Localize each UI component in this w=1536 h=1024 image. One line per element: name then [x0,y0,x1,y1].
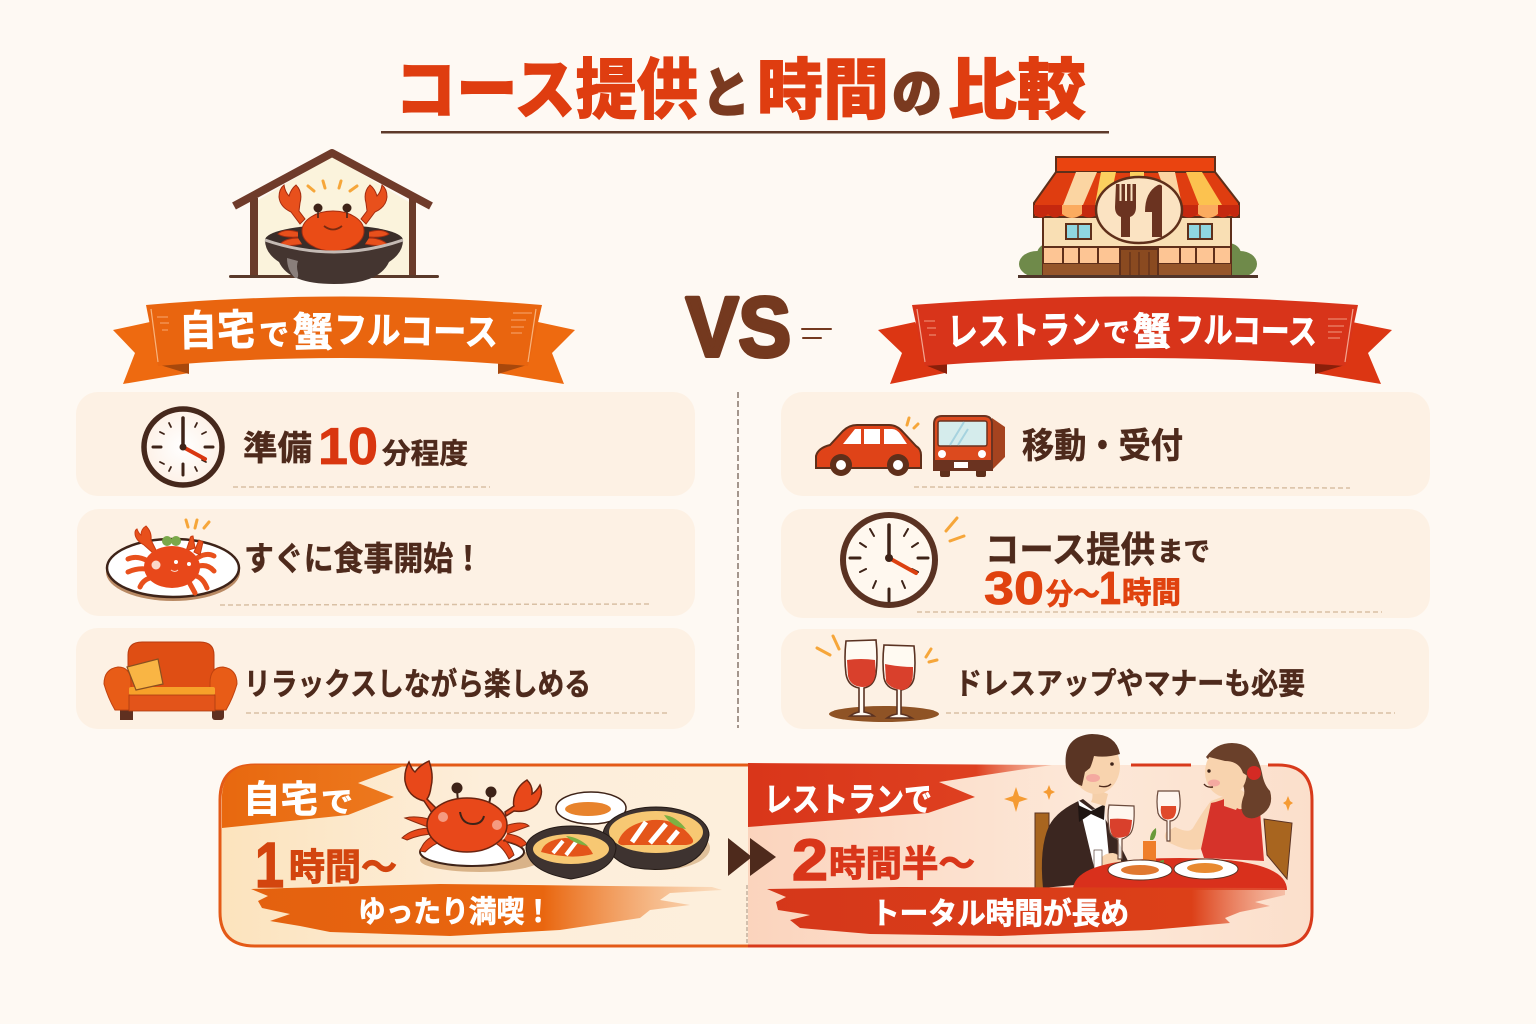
ribbon text: フルコース [334,310,498,353]
text [243,418,468,476]
banner flag: restaurant: レストランで [764,781,932,818]
restaurant brush stroke with text [767,887,1285,936]
panel: start eating card [77,509,695,616]
text: 分～ [1046,578,1100,611]
icon: clock [144,409,222,485]
text: 30 [984,562,1044,614]
banner flag: home: で [321,787,353,819]
panel: travel card [781,392,1430,496]
restaurant brush stroke with text: トータル時間が長め [871,897,1129,931]
title: と [702,64,750,124]
text [984,529,1210,614]
panel: relax card [76,628,695,729]
title underline [381,131,1109,134]
banner flag: restaurant [748,763,1052,827]
ribbon: restaurant [878,296,1392,384]
VS label: VS [686,280,791,374]
illustration: couple dining [1004,734,1293,890]
title [395,53,1086,127]
icon: wine glasses [817,636,939,722]
ribbon text: レストラン [947,310,1101,354]
ribbon text: で [1103,318,1130,348]
icon: bus [934,416,1005,477]
ribbon: home [113,296,575,384]
icon: house with crab pot [229,153,439,284]
panel: dress-up card [781,629,1429,729]
illustration: crab with dishes [402,761,710,879]
title: 比較 [948,53,1086,127]
title: 時間 [757,53,889,127]
panel: wait card [781,509,1430,618]
ribbon text [179,306,498,355]
text: コース提供 [985,529,1155,570]
home time value [255,829,397,901]
icon: sofa [104,642,237,720]
panel: relax card: リラックスしながら楽しめる [244,667,591,702]
text: まで [1157,537,1210,567]
ribbon text [947,310,1317,354]
text: 10 [318,418,378,476]
panel: start eating card: すぐに食事開始！ [244,540,483,577]
panel: travel card: 移動・受付 [1022,427,1183,466]
restaurant time value [792,828,975,893]
panel: summary banner [220,734,1312,946]
arrow: comparison [728,838,776,876]
home brush stroke with text [251,884,722,936]
panel: home prep card [76,392,695,496]
banner flag: home: 自宅 [243,779,318,820]
ribbon text: フルコース [1175,311,1317,352]
ribbon text: 蟹 [293,311,333,355]
text: 時間 [1122,577,1181,610]
banner flag: home [222,765,406,828]
home brush stroke with text: ゆったり満喫！ [358,896,552,929]
text: 1 [1099,562,1121,614]
home time value: 1 [255,829,284,901]
restaurant time value: 時間半～ [829,843,975,884]
panel: dress-up card: ドレスアップやマナーも必要 [955,668,1305,701]
icon: clock large [843,515,964,605]
text: 分程度 [382,438,468,469]
icon: car [816,418,921,476]
title: コース提供 [395,53,698,127]
restaurant time value: 2 [792,828,828,893]
ribbon text: 自宅 [179,306,255,355]
ribbon text: で [259,319,289,352]
text: 準備 [243,430,312,468]
center dashed divider [737,392,739,728]
icon: crab on plate [106,520,240,601]
home time value: 時間～ [289,847,397,888]
icon: restaurant [1018,157,1258,278]
title: の [892,66,942,124]
ribbon text: 蟹 [1133,312,1171,354]
